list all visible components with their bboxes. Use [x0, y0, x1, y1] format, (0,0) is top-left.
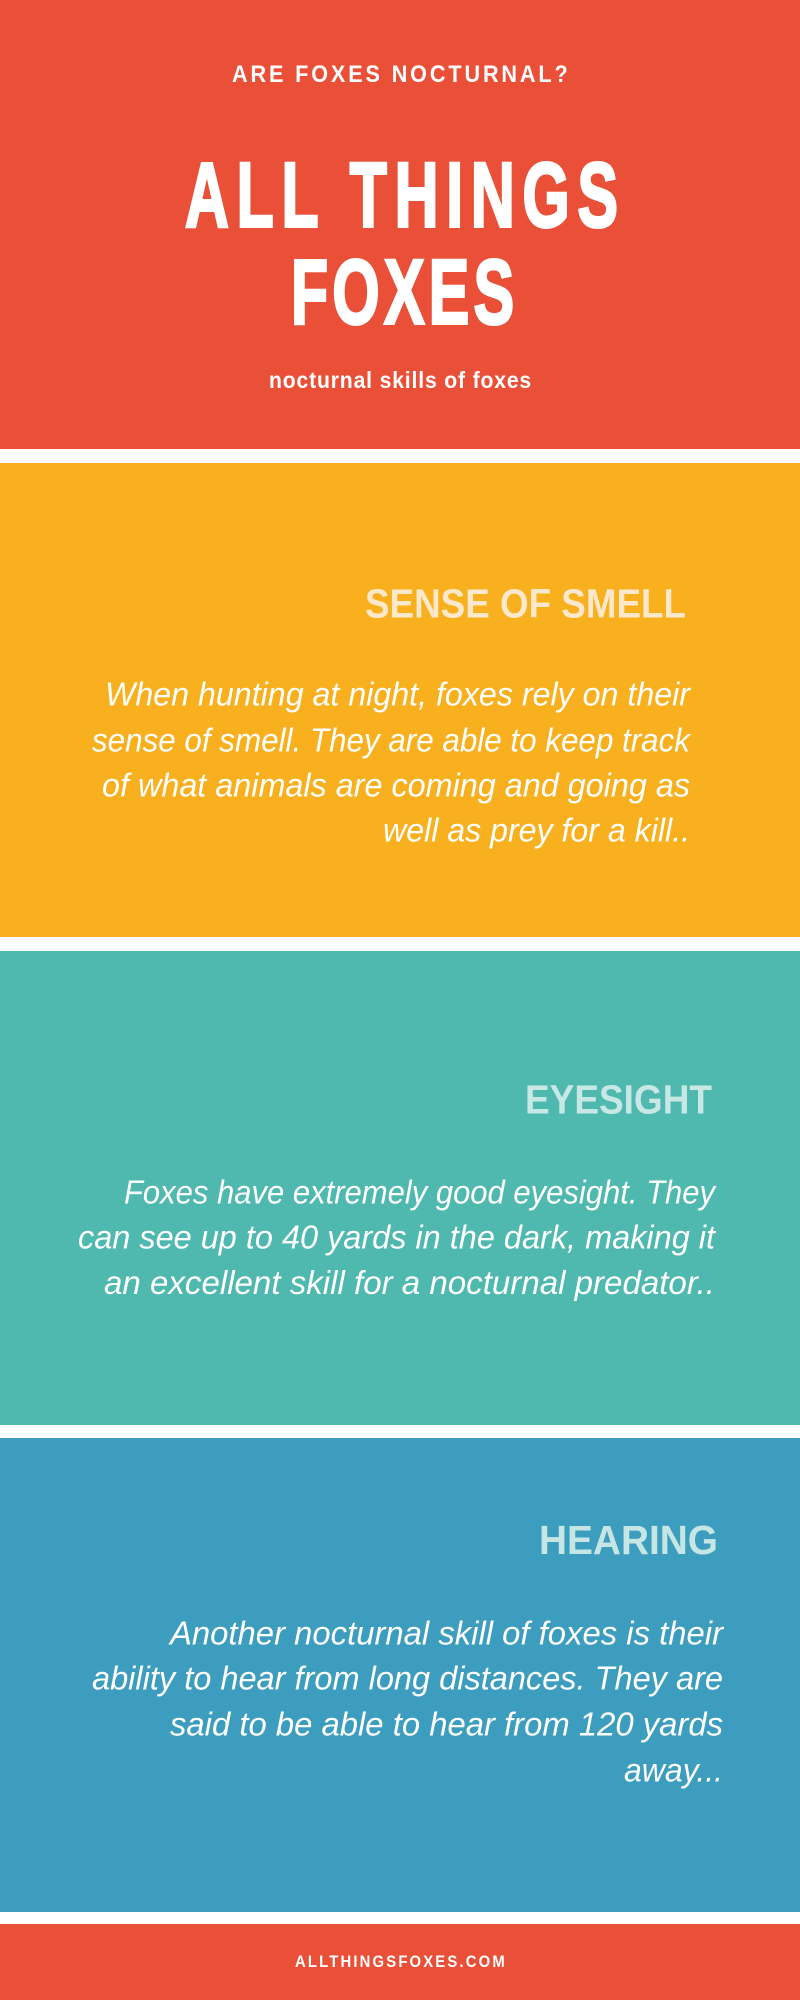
panel: eyesight [0, 951, 800, 1425]
panel: header [0, 0, 800, 449]
body text: hearing [92, 1614, 725, 1788]
heading: sense of smell: SENSE OF SMELL [365, 580, 686, 626]
heading: hearing: HEARING [539, 1517, 718, 1563]
panel: sense of smell [0, 463, 800, 937]
footer website: ALLTHINGSFOXES.COM [295, 1953, 505, 1971]
body text: sense of smell: of what animals are coming and going as [102, 766, 690, 804]
eyebrow: are foxes nocturnal: ARE FOXES NOCTURNAL? [232, 60, 568, 87]
subtitle: nocturnal skills of foxes [269, 367, 531, 393]
body text: eyesight: can see up to 40 yards in the dark, making it [78, 1218, 717, 1256]
title [185, 143, 618, 344]
body text: sense of smell: When hunting at night, foxes rely on their [105, 676, 692, 712]
body text: eyesight: Foxes have extremely good eyesight. They [124, 1174, 717, 1210]
body text: hearing: Another nocturnal skill of foxes is their [168, 1614, 725, 1652]
body text: sense of smell [92, 676, 692, 848]
body text: sense of smell: well as prey for a kill.. [383, 812, 690, 848]
title: FOXES [291, 240, 514, 344]
body text: hearing: said to be able to hear from 120 yards [170, 1706, 723, 1742]
body text: eyesight: an excellent skill for a nocturnal predator.. [104, 1264, 715, 1301]
body text: hearing: away... [624, 1752, 723, 1788]
title: ALL THINGS [185, 143, 618, 247]
heading: eyesight: EYESIGHT [525, 1076, 712, 1122]
panel: hearing [0, 1438, 800, 1912]
body text: hearing: ability to hear from long distances. They are [92, 1660, 723, 1696]
body text: eyesight [78, 1174, 717, 1301]
body text: sense of smell: sense of smell. They are able to keep track [92, 722, 691, 758]
panel: footer [0, 1924, 800, 2000]
